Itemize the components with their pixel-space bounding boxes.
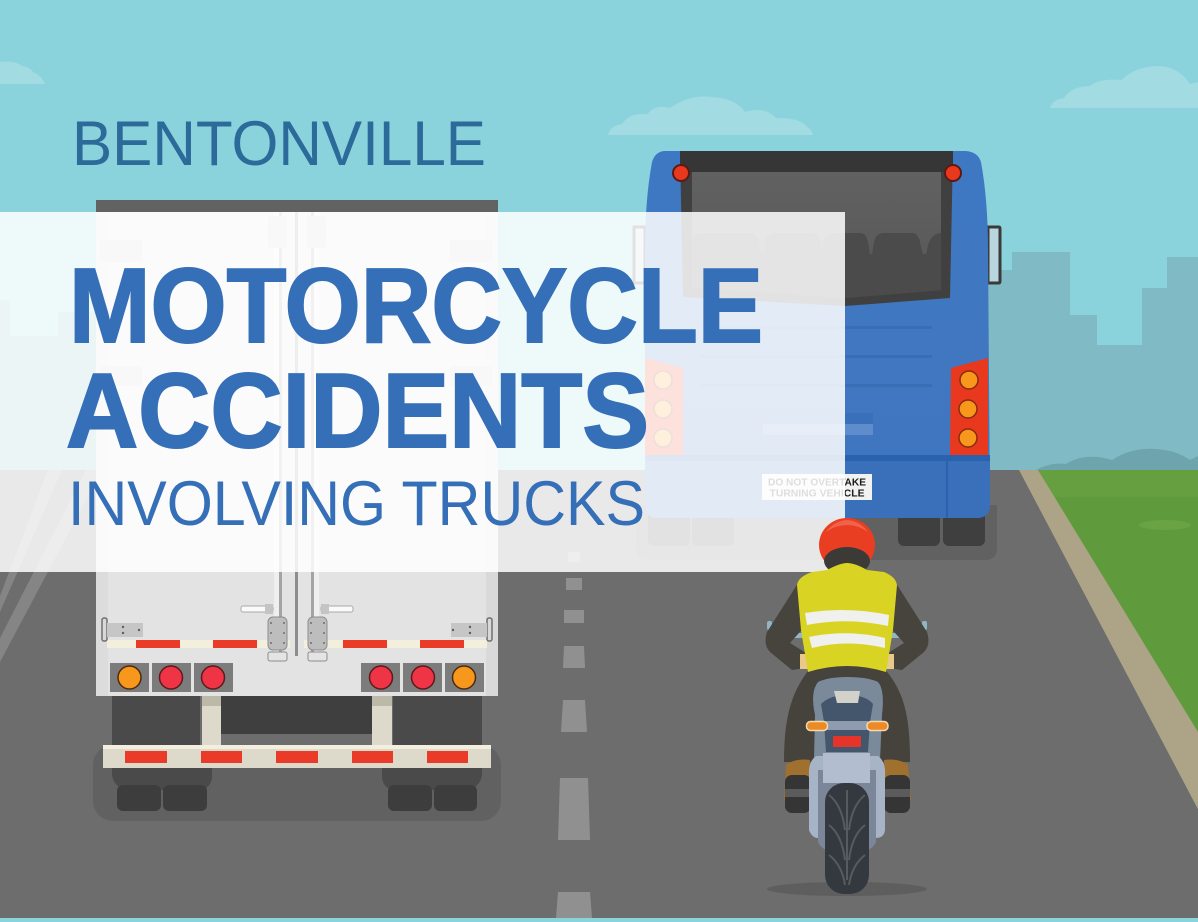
bus lower stripe (645, 455, 990, 461)
tyre tread (829, 790, 865, 885)
truck lights: red (160, 666, 434, 689)
truck door handles (241, 604, 353, 614)
title line one: MOTORCYCLE (69, 247, 763, 365)
tree line (1036, 449, 1198, 470)
vest reflective stripes (805, 610, 889, 648)
cloud: top right (1050, 66, 1198, 108)
road kerb (1019, 470, 1198, 809)
bus window top band (680, 151, 953, 172)
bus handle bar (763, 413, 873, 424)
motorcycle indicators (806, 722, 888, 730)
bus warning plate (762, 474, 872, 500)
rider legs (784, 666, 910, 762)
road (0, 470, 1198, 918)
truck lights: amber (118, 666, 476, 689)
motorcycle number plate (833, 736, 861, 747)
truck door seam (274, 212, 319, 656)
bus handle bar light (763, 424, 873, 435)
bus mirrors (634, 227, 1000, 283)
truck door edge shading (96, 212, 498, 696)
rider hands (800, 654, 894, 669)
bus tail light: right (950, 358, 988, 455)
bus tyres (648, 510, 985, 546)
motorcycle rear tyre (825, 783, 869, 894)
motorcycle tail lamp (834, 691, 860, 703)
cloud: top left (0, 62, 45, 84)
bus panel seam (946, 460, 948, 518)
grass patch (1139, 520, 1191, 530)
truck door latches (268, 617, 327, 661)
bus seats (692, 233, 941, 298)
city skyline: right (985, 252, 1198, 470)
bus rear window frame (680, 151, 953, 306)
title line two: ACCIDENTS (66, 352, 649, 470)
rider helmet (819, 518, 875, 572)
helmet highlight (826, 520, 868, 532)
motorcyclist (766, 518, 928, 896)
truck door top hinges (100, 216, 492, 386)
truck side hinges (102, 618, 492, 641)
truck reflector strip (107, 640, 487, 648)
bottom strip (0, 918, 1198, 922)
truck light boxes (110, 663, 484, 692)
bus rear window (692, 172, 941, 298)
centre lane dashes (556, 552, 592, 918)
truck (93, 200, 501, 821)
hi-vis vest (797, 563, 897, 672)
motorcycle seat cowl (813, 677, 883, 760)
truck body (96, 200, 498, 696)
left lane lines (0, 470, 102, 662)
bus body (645, 151, 990, 518)
motorcycle fender (809, 756, 885, 838)
truck bumper (103, 745, 491, 768)
motorcycle mudguard (823, 753, 870, 783)
bus tail light: left (645, 358, 683, 455)
motorcycle tail panel (821, 695, 873, 752)
motorcycle fork shade (818, 770, 876, 850)
bus warning plate: TURNING VEHICLE (770, 488, 864, 500)
bus warning plate: DO NOT OVERTAKE (768, 476, 866, 488)
truck wheel housings (112, 696, 482, 790)
subtitle: INVOLVING TRUCKS (68, 469, 645, 539)
truck bumper posts (202, 696, 392, 746)
rider neck (824, 547, 870, 575)
bus vents (700, 326, 932, 387)
grass (1030, 470, 1198, 760)
bus shadow (636, 505, 997, 560)
truck shadow (93, 745, 501, 821)
city skyline: left (0, 300, 100, 470)
motorcycle shadow (767, 882, 927, 896)
handlebar grips (767, 621, 927, 638)
truck tyres (117, 785, 477, 811)
cloud: centre (608, 96, 813, 135)
rider arms (766, 580, 928, 670)
truck roof band (96, 200, 498, 212)
location heading: BENTONVILLE (72, 109, 486, 179)
truck underside (221, 696, 373, 734)
motorcycle indicator bar (826, 721, 868, 730)
bus (634, 151, 1000, 560)
bus marker lamps (673, 165, 961, 181)
grass lower band (1050, 497, 1198, 760)
rider boots (784, 760, 911, 813)
bus lower panel (645, 460, 990, 518)
translucent title panel (0, 212, 845, 572)
